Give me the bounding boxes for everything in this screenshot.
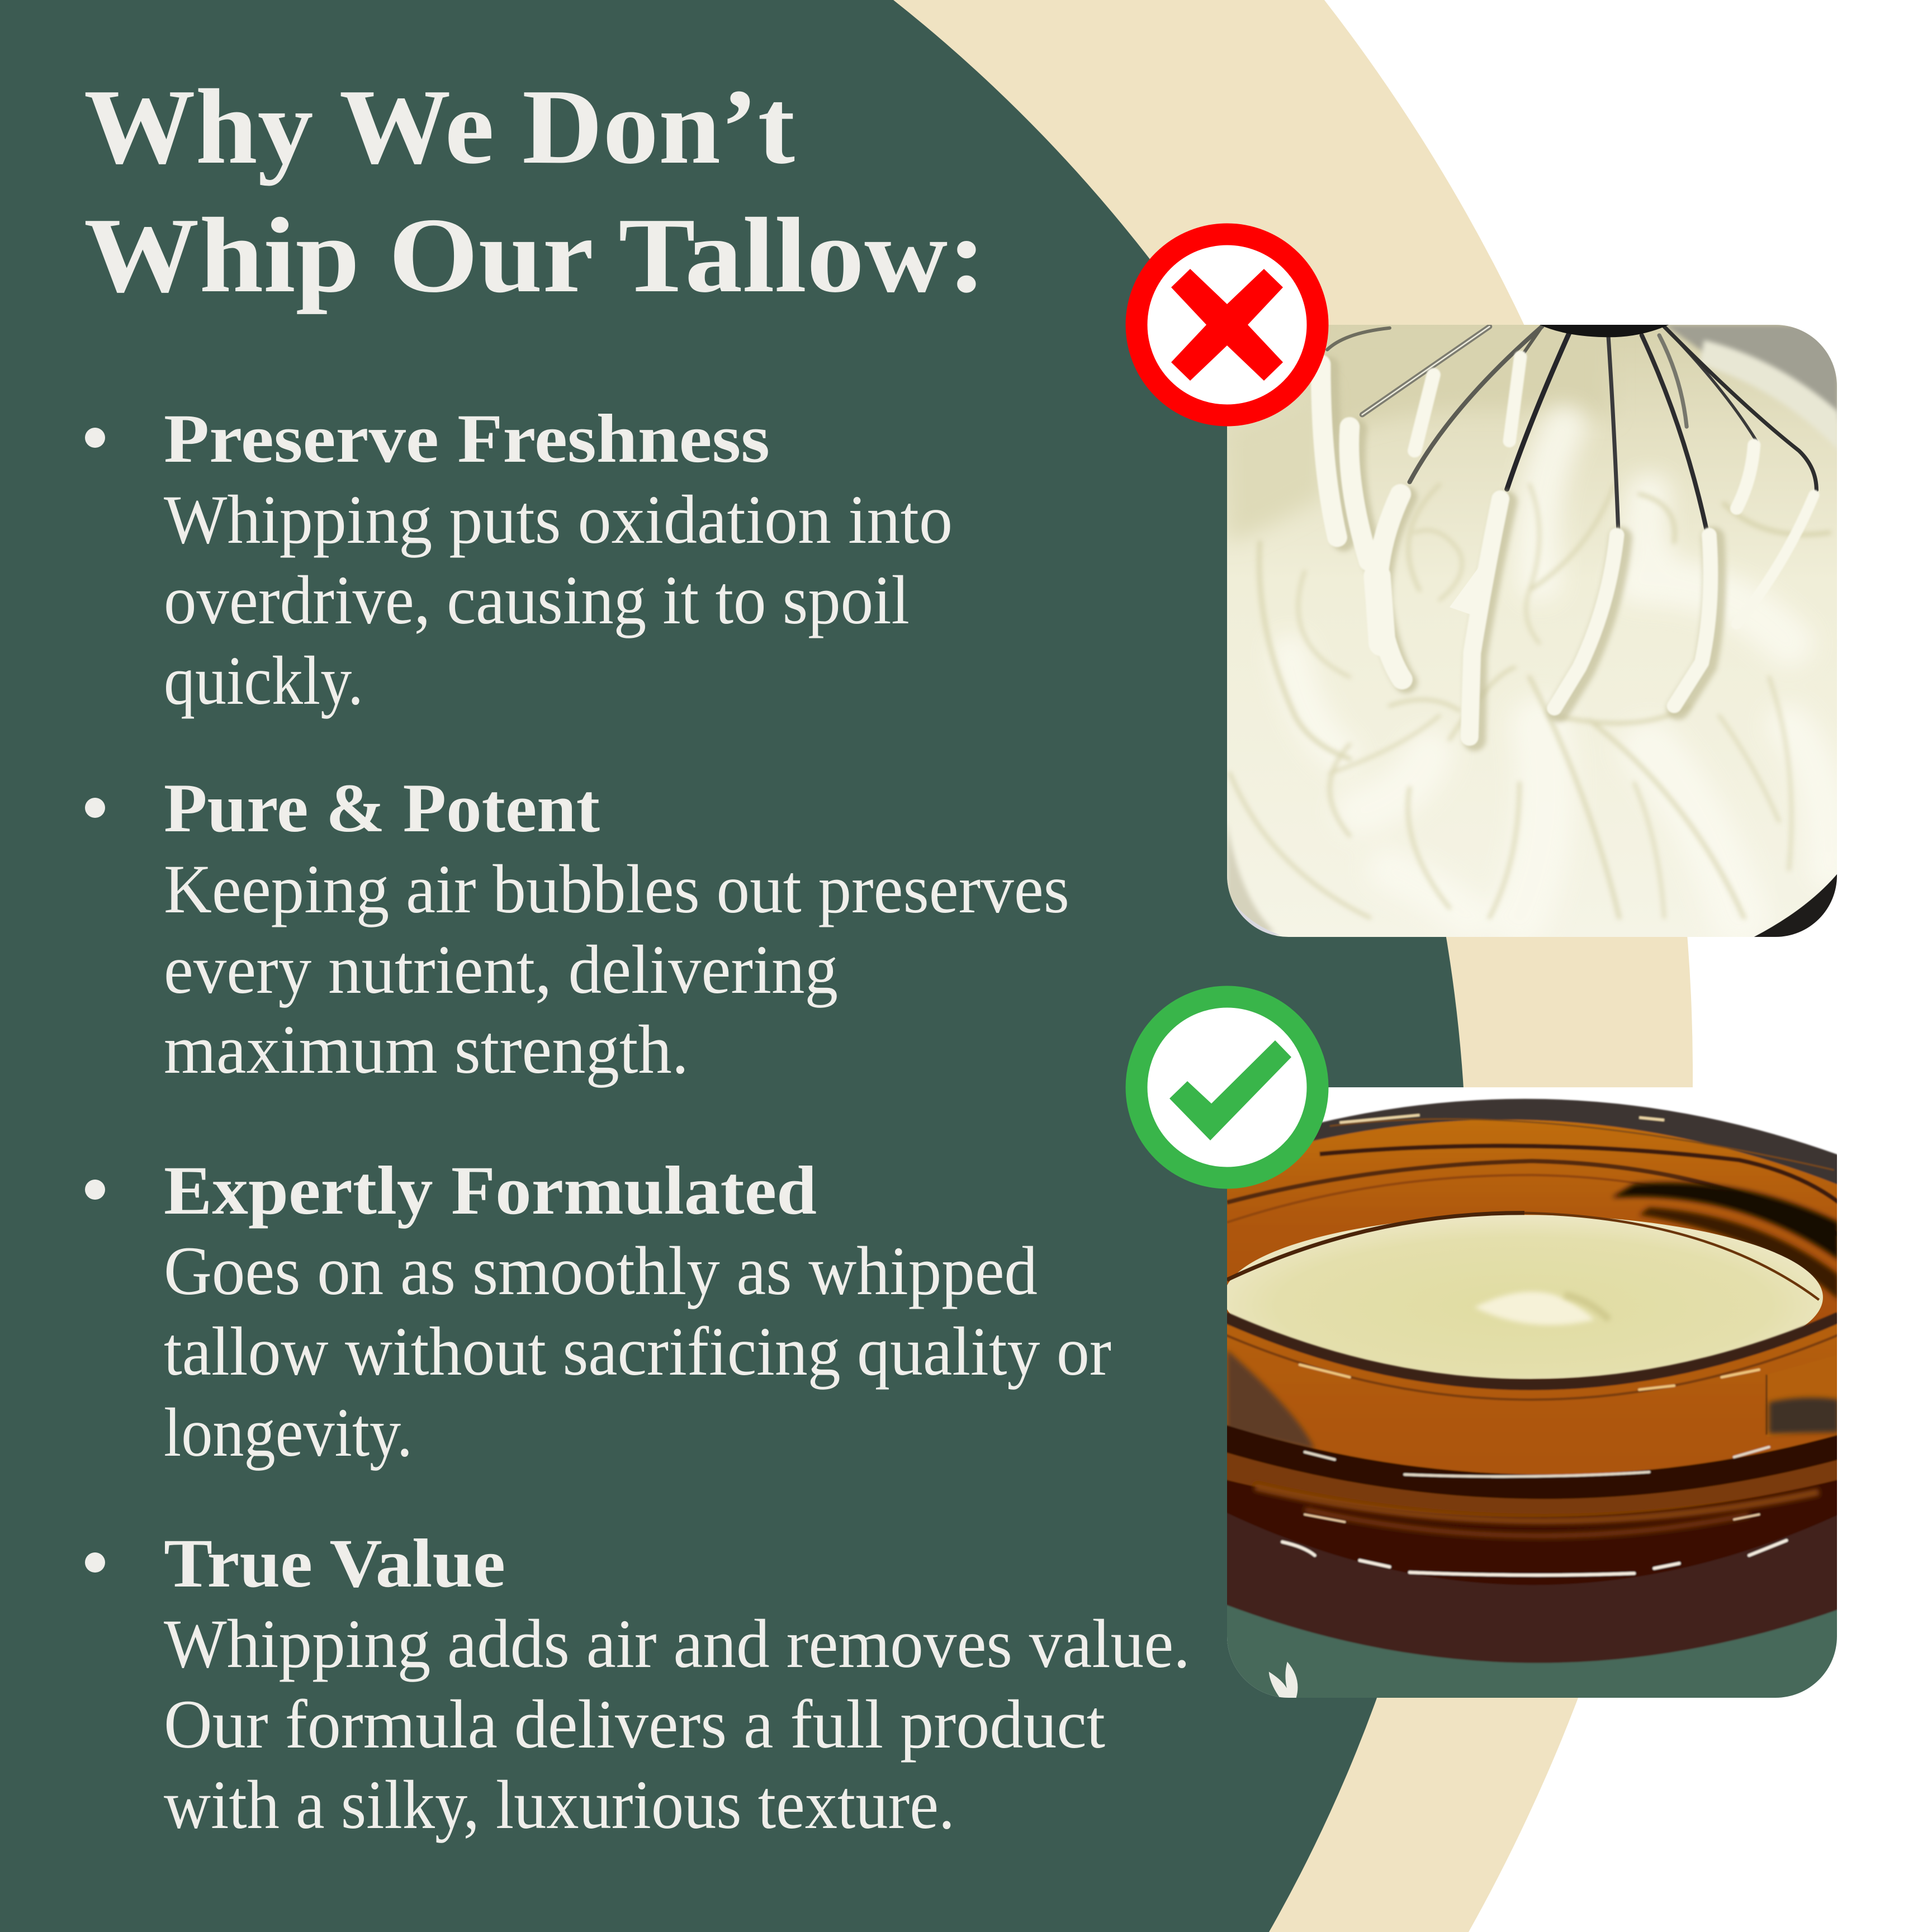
benefit: True Value [85,1525,1190,1843]
benefit: Preserve Freshness: overdrive, causing it to spoil [164,562,910,638]
cream on wires [1321,357,1814,740]
benefit: True Value: Whipping adds air and removes value. [164,1606,1190,1682]
whisk hub [1540,325,1669,337]
benefit: Preserve Freshness [85,400,953,719]
benefit: True Value: True Value [164,1525,505,1602]
icon: green check badge [1137,997,1318,1178]
benefit: Pure & Potent: maximum strength. [164,1011,689,1088]
bowl edge [1754,872,1839,937]
benefit: True Value: with a silky, luxurious texture. [164,1767,955,1843]
jar rim and interior [1225,1099,1839,1400]
benefit: Preserve Freshness: Whipping puts oxidation into [164,481,953,558]
benefit: Preserve Freshness: quickly. [164,642,363,719]
background: dark green arc panel [0,0,1467,1932]
whisk wires [1327,326,1816,530]
benefit: Expertly Formulated: tallow without sacrificing quality or [164,1313,1111,1390]
benefit: Expertly Formulated: Goes on as smoothly as whipped [164,1233,1038,1309]
jar front wall [1225,1317,1839,1719]
benefit: Preserve Freshness: Preserve Freshness [164,400,770,477]
tallow balm surface [1224,1215,1823,1380]
benefit: Pure & Potent: Keeping air bubbles out preserves [164,851,1069,927]
title: Why We Don’t [84,67,795,186]
title: Whip Our Tallow: [84,196,986,315]
photo: amber jar of tallow balm [1224,1085,1844,1719]
benefit: True Value: Our formula delivers a full product [164,1686,1105,1763]
photo: whipped tallow in mixer [1225,321,1844,942]
icon: red cross badge [1137,234,1318,415]
title [84,67,986,315]
benefit: Expertly Formulated [85,1152,1111,1471]
benefit: Expertly Formulated: longevity. [164,1394,413,1471]
label leaf mark [1269,1662,1298,1699]
benefit: Pure & Potent: every nutrient, delivering [164,931,838,1008]
benefit: Pure & Potent [85,770,1069,1088]
benefit: Expertly Formulated: Expertly Formulated [164,1152,817,1229]
benefit: Pure & Potent: Pure & Potent [164,770,600,846]
whipped peaks shading [1230,427,1829,918]
